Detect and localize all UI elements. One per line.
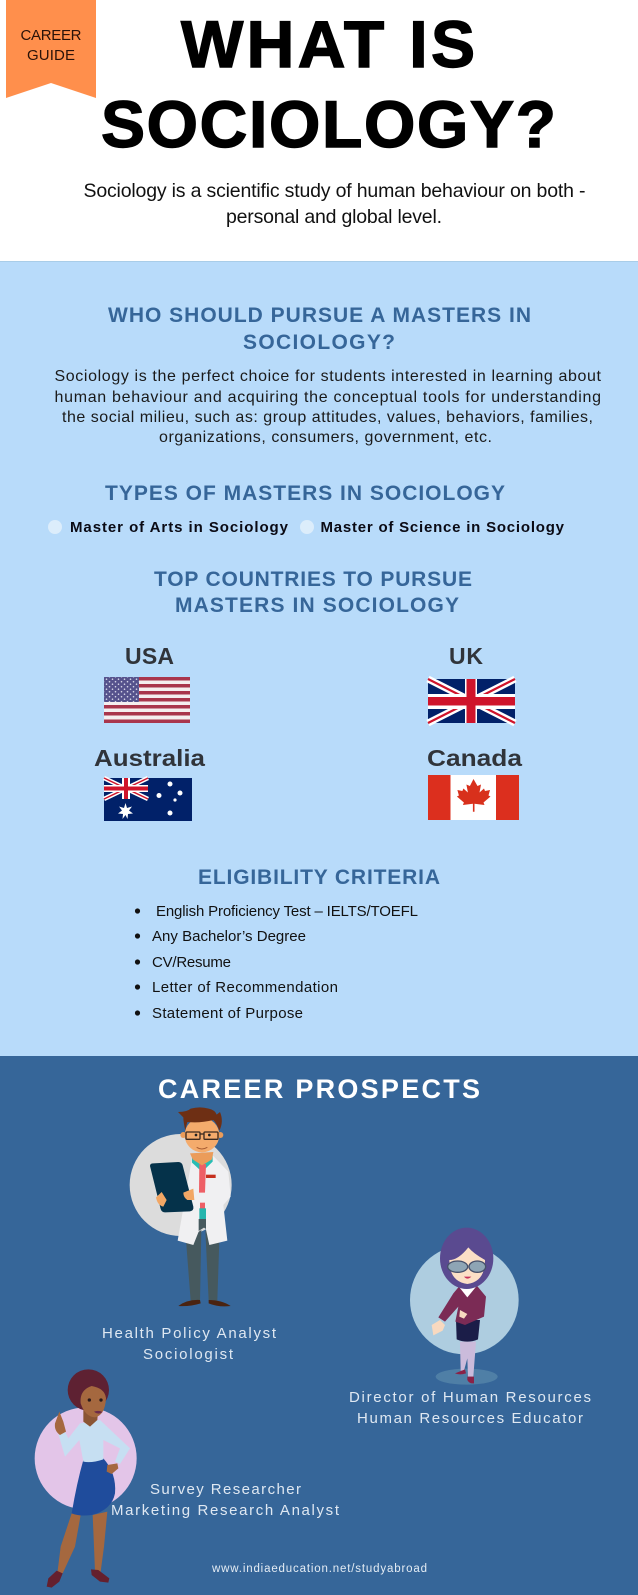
eligibility list: English Proficiency Test – IELTS/TOEFL [156,903,418,920]
caption: survey researcher careers: Marketing Research Analyst [111,1502,340,1519]
types list [48,519,565,536]
text block: who should pursue: organizations, consumers, government, etc. [159,429,492,446]
eligibility list: Any Bachelor’s Degree [152,928,306,945]
text block: who should pursue: the social milieu, such as: group attitudes, values, behaviors, families, [62,409,593,426]
career guide ribbon: GUIDE [27,47,75,64]
country: Australia [94,745,205,821]
heading: who should pursue [108,304,531,354]
footer url: www.indiaeducation.net/studyabroad [211,1563,427,1575]
caption: doctor careers: Sociologist [143,1346,234,1363]
heading: who should pursue: WHO SHOULD PURSUE A MASTERS IN [108,304,531,327]
text block: who should pursue [54,368,602,446]
caption: doctor careers [102,1325,277,1363]
country: USA [104,643,190,723]
illustration: human resources woman [410,1228,519,1385]
eligibility list [135,903,418,1022]
heading: types of masters: TYPES OF MASTERS IN SOCIOLOGY [105,482,505,505]
text block: who should pursue: human behaviour and acquiring the conceptual tools for understanding [54,389,601,406]
country: UK: UK [449,643,483,669]
intro text: personal and global level. [226,206,442,228]
text block: who should pursue: Sociology is the perfect choice for students interested in learning about [54,368,602,385]
icon: USA flag [104,677,190,723]
country: Australia: Australia [94,745,205,771]
eligibility list: Letter of Recommendation [152,979,338,996]
icon: Australia flag [104,778,192,821]
country: Canada [427,745,522,820]
heading: eligibility criteria: ELIGIBILITY CRITERIA [198,866,440,889]
caption: doctor careers: Health Policy Analyst [102,1325,277,1342]
title: WHAT IS [181,7,475,81]
heading: top countries: TOP COUNTRIES TO PURSUE [154,568,472,591]
country: USA: USA [125,643,174,669]
illustration: survey researcher woman [35,1369,137,1588]
types list: Master of Arts in Sociology [70,519,289,536]
panel: light blue information section [0,261,638,1056]
caption: human resources careers: Human Resources Educator [357,1410,583,1427]
heading: top countries: MASTERS IN SOCIOLOGY [175,594,459,617]
title: SOCIOLOGY? [101,87,556,161]
eligibility list: Statement of Purpose [152,1005,303,1022]
career guide ribbon: CAREER [20,27,82,44]
header panel [0,0,638,261]
eligibility list: CV/Resume [152,954,231,971]
caption: survey researcher careers: Survey Researcher [150,1481,301,1498]
caption: survey researcher careers [111,1481,340,1519]
icon: Canada flag [428,775,519,820]
country: Canada: Canada [427,745,522,771]
caption: human resources careers: Director of Human Resources [349,1389,591,1406]
intro text: Sociology is a scientific study of human behaviour on both - [84,180,586,202]
caption: human resources careers [349,1389,591,1427]
illustration: doctor [130,1107,232,1306]
heading: who should pursue: SOCIOLOGY? [243,331,395,354]
types list: Master of Science in Sociology [320,519,565,536]
heading: top countries [154,568,472,617]
intro text [84,180,586,228]
title [101,7,556,161]
panel: career prospects [0,1056,638,1595]
heading: career prospects: CAREER PROSPECTS [158,1074,480,1104]
career guide ribbon [6,0,96,98]
icon: UK flag [428,679,515,723]
country: UK [428,643,515,723]
